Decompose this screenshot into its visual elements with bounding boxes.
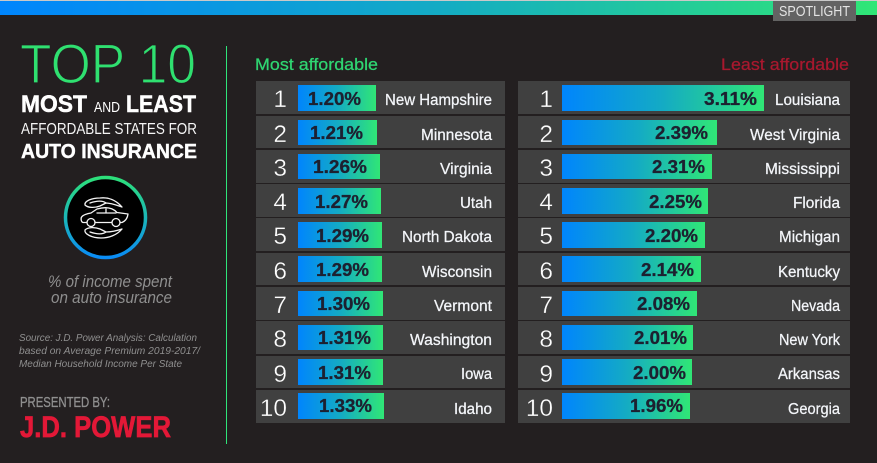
row: Michigan: Michigan [779,229,840,246]
title block [20,32,197,163]
row: Florida: Florida [793,195,840,212]
row: Minnesota [256,116,505,148]
row: Michigan: 5 [539,223,553,250]
row: North Dakota: 5 [273,223,287,250]
row: New Hampshire [256,81,505,114]
subheading: affordable states for: AFFORDABLE STATES FOR [21,121,197,138]
row: Arkansas: 2.00% [633,363,686,383]
heading: least affordable: Least affordable [721,55,849,74]
row: Utah: 4 [273,189,287,216]
row: Kentucky: 2.14% [641,260,694,280]
row: Mississippi: Mississippi [765,161,840,178]
row: Georgia [518,390,850,423]
source note [19,333,201,370]
row: New Hampshire: 1.20% [308,89,361,109]
row: Virginia [256,150,505,183]
row: North Dakota: North Dakota [402,229,492,246]
source note: Source: J.D. Power Analysis: Calculation [19,333,197,344]
row: Arkansas: Arkansas [778,366,840,383]
spotlight tab: SPOTLIGHT [779,3,850,20]
presented by: PRESENTED BY: [20,395,110,411]
heading: auto insurance: AUTO INSURANCE [21,141,197,163]
row: Nevada: 2.08% [637,294,690,314]
row: Vermont: Vermont [434,298,493,315]
row: Iowa: 9 [273,361,287,388]
caption: percent of income: on auto insurance [51,289,172,307]
row: Louisiana: 1 [539,86,553,113]
row: Idaho: Idaho [454,401,492,418]
row: Florida [518,184,850,217]
row: Michigan [518,218,850,251]
row: Kentucky: 6 [539,258,553,285]
row: New York: 2.01% [634,328,687,348]
row: Washington: 8 [273,326,287,353]
row: Virginia: 1.26% [313,157,367,177]
row: Minnesota: Minnesota [421,127,492,144]
row: Wisconsin: 1.29% [316,260,369,280]
row: Wisconsin: Wisconsin [422,264,492,281]
row: West Virginia [518,116,850,148]
heading: most and least: LEAST [126,91,196,118]
row: West Virginia: West Virginia [750,127,840,144]
row: New Hampshire: New Hampshire [385,92,492,109]
row: Mississippi [518,150,850,183]
row: Nevada: Nevada [791,298,840,315]
top gradient band [0,1,877,15]
heading: most and least: MOST [21,91,87,118]
row: Utah: 1.27% [315,192,368,212]
row: North Dakota: 1.29% [316,226,369,246]
row: Utah: Utah [460,195,492,212]
heading: most and least: AND [94,99,120,116]
row: Arkansas: 9 [539,361,553,388]
row: Vermont [256,287,505,320]
row: Vermont: 1.30% [317,294,370,314]
icon: car protected by hands [66,178,146,258]
row: Mississippi: 2.31% [652,157,705,177]
row: Florida: 4 [539,189,553,216]
title: top 10: TOP 10 [20,32,196,95]
row: New York: 8 [539,326,553,353]
row: Virginia: 3 [273,155,287,182]
row: Nevada: 7 [539,292,553,319]
row: Washington: Washington [410,332,492,349]
row: Washington [256,321,505,354]
row: Florida: 2.25% [649,192,702,212]
row: West Virginia: 2.39% [655,123,708,143]
heading: most and least [21,91,196,118]
row: Kentucky: Kentucky [778,264,840,281]
row: Georgia: Georgia [788,401,840,418]
row: Nevada [518,287,850,320]
row: Utah [256,184,505,217]
row: Wisconsin [256,253,505,285]
row: North Dakota [256,218,505,251]
row: Minnesota: 1.21% [310,123,363,143]
row: Mississippi: 3 [539,155,553,182]
row: Iowa [256,356,505,388]
row: Minnesota: 2 [273,121,287,148]
row: Iowa: Iowa [461,366,492,383]
row: Idaho: 10 [260,395,287,422]
row: Washington: 1.31% [318,328,371,348]
row: New Hampshire: 1 [273,86,287,113]
row: Kentucky [518,253,850,285]
caption: percent of income [48,273,173,307]
row: Virginia: Virginia [440,161,492,178]
row: Louisiana [518,81,850,114]
row: Idaho [256,390,505,423]
row: Georgia: 10 [526,395,553,422]
heading: most affordable: Most affordable [255,55,378,74]
caption: percent of income: % of income spent [48,273,173,291]
row: Iowa: 1.31% [318,363,371,383]
row: Louisiana: Louisiana [775,92,840,109]
row: New York: New York [779,332,840,349]
source note: Median Household Income Per State [19,359,182,370]
logo: J.D. Power: J.D. POWER [20,411,171,444]
panel: most affordable table [256,81,505,423]
row: West Virginia: 2 [539,121,553,148]
row: Wisconsin: 6 [273,258,287,285]
row: Idaho: 1.33% [319,396,372,416]
panel: least affordable table [518,81,850,423]
source note: based on Average Premium 2019-2017/ [19,346,201,357]
row: Vermont: 7 [273,292,287,319]
row: Georgia: 1.96% [630,396,683,416]
row: Michigan: 2.20% [645,226,698,246]
row: Arkansas [518,356,850,388]
row: New York [518,321,850,354]
row: Louisiana: 3.11% [704,89,757,109]
